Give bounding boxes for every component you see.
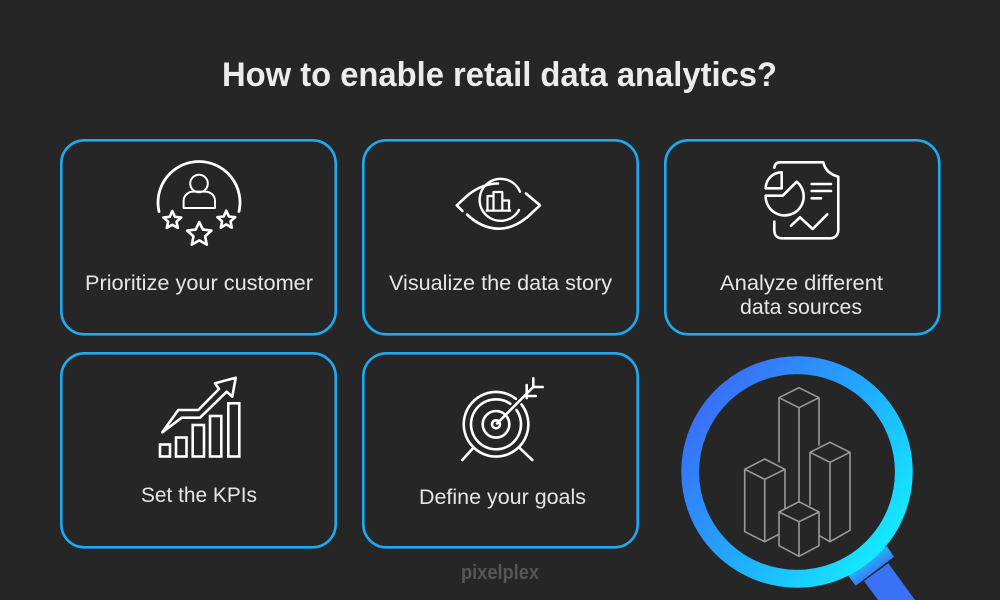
panel: analyze different data sources	[665, 140, 939, 334]
icon: customer with stars	[158, 161, 240, 245]
icon: growth bars with arrow	[160, 378, 239, 456]
label: Prioritize your customer	[85, 271, 313, 295]
panel: visualize the data story	[363, 140, 638, 334]
icon: report document	[766, 162, 838, 238]
label: Define your goals	[419, 485, 586, 509]
label: Analyze different	[720, 271, 883, 295]
icon: eye with bar chart	[457, 179, 540, 229]
logo: pixelplex: pixelplex	[461, 562, 539, 584]
icon: target with arrow	[462, 378, 543, 460]
isometric buildings	[745, 388, 850, 556]
magnifying glass illustration	[690, 365, 915, 600]
lens ring	[690, 365, 904, 579]
panel: set the KPIs	[61, 353, 336, 547]
label: Visualize the data story	[389, 271, 612, 295]
handle	[864, 563, 915, 600]
handle collar	[848, 546, 894, 586]
panel: prioritize your customer	[61, 140, 336, 334]
label: Set the KPIs	[141, 483, 257, 507]
panel: define your goals	[363, 353, 638, 547]
title: How to enable retail data analytics?	[222, 56, 777, 94]
label line 2: data sources	[740, 295, 862, 319]
